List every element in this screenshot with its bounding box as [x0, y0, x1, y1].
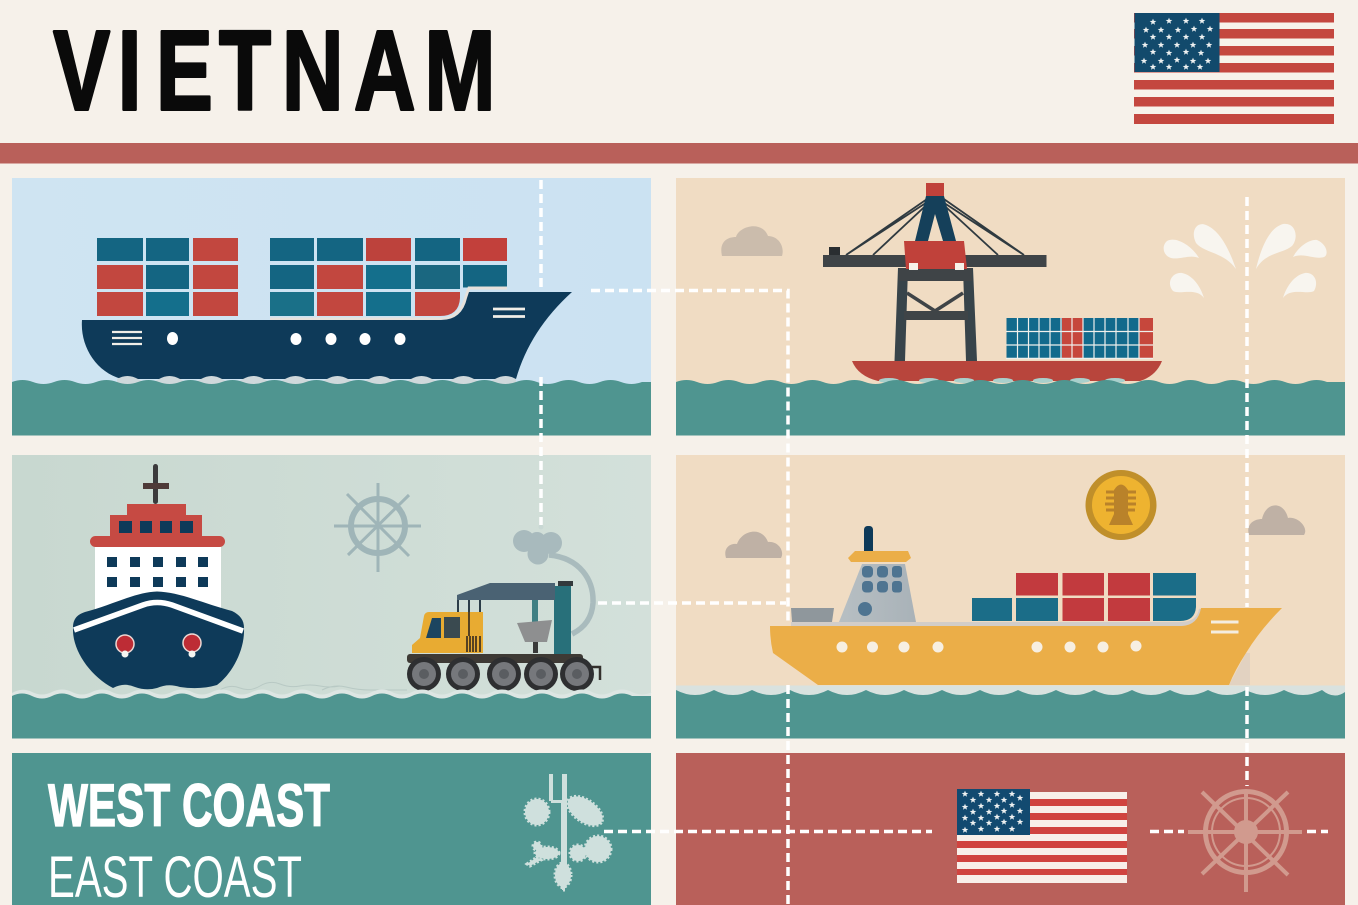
front-view ship — [73, 464, 244, 689]
title: VIETNAM — [53, 8, 495, 134]
icon: cloud left — [725, 532, 782, 558]
icon: lung-shaped tree — [525, 774, 611, 890]
icon: US flag top right — [1134, 13, 1334, 124]
containers: right stack — [270, 238, 507, 316]
containers on barge — [1006, 318, 1153, 358]
panel: port crane on tan sky — [676, 178, 1345, 436]
panel: container ship on blue sky — [12, 178, 651, 436]
foam under barge — [879, 378, 1125, 383]
icon: ship wheel — [334, 483, 421, 572]
thin wave lines — [220, 682, 407, 690]
crane — [823, 183, 1046, 361]
crane truck — [407, 581, 600, 691]
water — [676, 690, 1345, 738]
barge hull — [852, 361, 1162, 381]
dashed route lines — [541, 180, 1328, 905]
cargo ship — [770, 526, 1282, 685]
containers: left stack — [97, 238, 238, 316]
header rule — [0, 143, 1358, 164]
heading: west coast: WEST COAST — [48, 772, 330, 839]
icon: gold coin with emblem — [1086, 470, 1156, 540]
hull: navy container ship — [82, 288, 572, 379]
panel: flag and wheel — [676, 753, 1345, 905]
foam band — [676, 686, 1345, 696]
panel: yellow cargo ship on tan sky — [676, 455, 1345, 738]
icon: white water splash — [1164, 224, 1327, 298]
water — [676, 380, 1345, 436]
foam under hull — [117, 376, 516, 386]
icon: ship wheel — [1188, 790, 1302, 892]
panel: front-view ship and truck on sage sky — [12, 455, 652, 738]
icon: cloud — [721, 226, 783, 256]
icon: cloud right — [1248, 505, 1305, 535]
smoke trail — [513, 524, 593, 634]
water — [12, 380, 651, 436]
panel: coast labels — [12, 753, 651, 905]
foam and water — [12, 690, 652, 705]
icon: US flag — [957, 789, 1127, 883]
